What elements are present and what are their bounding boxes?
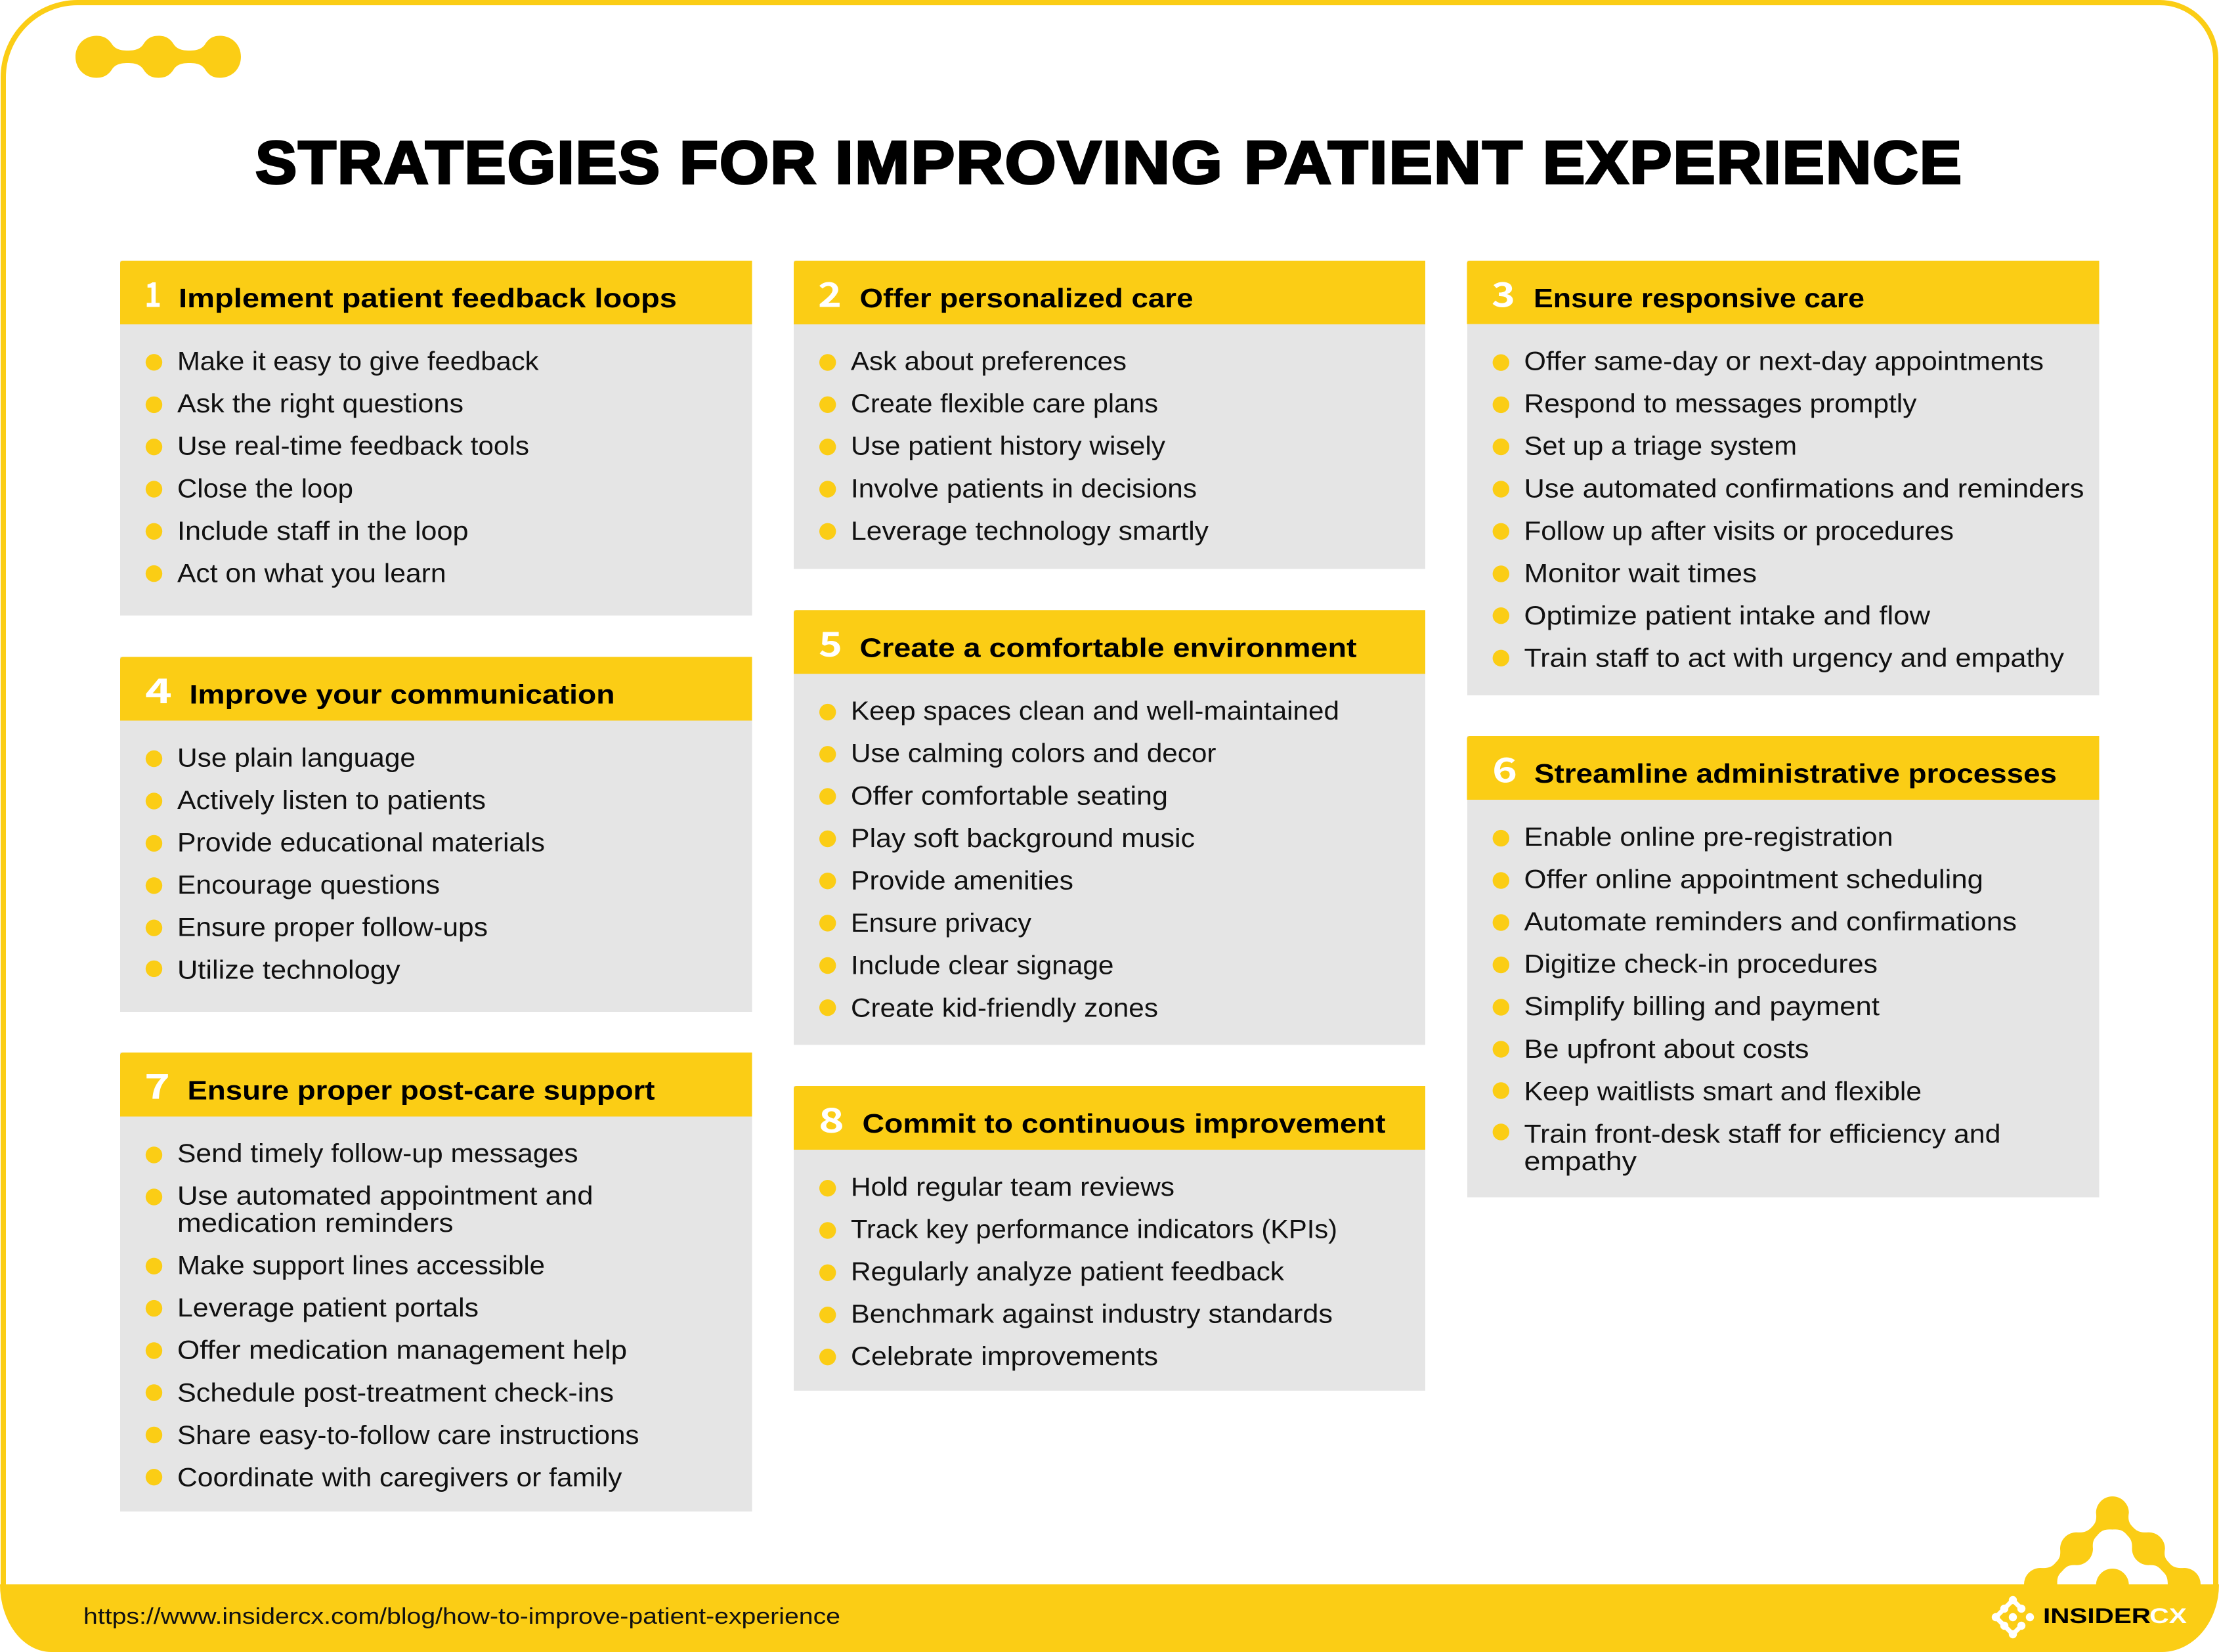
bullets <box>1493 830 1509 1141</box>
panel: 6 Streamline administrative processes <box>1467 736 2100 1198</box>
list text: Use patient history wisely <box>851 432 1165 461</box>
title: FOR <box>679 129 817 196</box>
list text: Use automated appointment and <box>177 1181 593 1210</box>
list text: Optimize patient intake and flow <box>1524 601 1930 630</box>
list text: Monitor wait times <box>1524 559 1757 588</box>
list text: Send timely follow-up messages <box>177 1139 578 1168</box>
list text: Follow up after visits or procedures <box>1524 517 1954 546</box>
header band <box>120 261 752 324</box>
title: STRATEGIES <box>255 129 661 196</box>
list text: Respond to messages promptly <box>1524 389 1917 418</box>
list text: Automate reminders and confirmations <box>1524 907 2017 936</box>
panel: 8 Commit to continuous improvement <box>794 1086 1425 1391</box>
list text <box>1524 347 2084 673</box>
list text: Actively listen to patients <box>177 786 486 815</box>
heading: Ensure responsive care <box>1534 283 1864 313</box>
list text: Hold regular team reviews <box>851 1173 1174 1202</box>
bullets <box>146 750 162 977</box>
list text: Ensure proper follow-ups <box>177 913 488 942</box>
number: 2 <box>818 268 842 316</box>
list text: Make it easy to give feedback <box>177 347 540 376</box>
heading: Improve your communication <box>189 679 614 709</box>
number: 5 <box>819 617 842 666</box>
header band <box>120 657 752 721</box>
bullets <box>819 704 836 1016</box>
panel background <box>1467 261 2100 695</box>
list text <box>851 1173 1337 1371</box>
list text: Act on what you learn <box>177 559 446 588</box>
list text: medication reminders <box>177 1209 453 1238</box>
panel: 2 Offer personalized care <box>794 261 1425 569</box>
number: 8 <box>819 1093 844 1142</box>
header band <box>794 1086 1425 1150</box>
list text <box>177 347 540 588</box>
panel background <box>794 610 1425 1045</box>
number: 7 <box>144 1060 170 1108</box>
panel background <box>1467 736 2100 1198</box>
icon: corner network shape <box>2024 1496 2201 1585</box>
header band <box>120 1053 752 1116</box>
bullets <box>819 354 836 540</box>
list text: Offer online appointment scheduling <box>1524 865 1983 894</box>
header band <box>1467 736 2100 800</box>
heading: Streamline administrative processes <box>1534 758 2057 789</box>
list text: Train front-desk staff for efficiency and <box>1524 1119 2001 1148</box>
footer url: https://www.insidercx.com/blog/how-to-improve-patient-experience <box>83 1604 840 1629</box>
list text <box>851 697 1339 1022</box>
list text <box>1524 823 2017 1176</box>
list text: Benchmark against industry standards <box>851 1300 1333 1329</box>
list text: Simplify billing and payment <box>1524 992 1880 1021</box>
list text: Offer comfortable seating <box>851 781 1168 810</box>
list text: Use plain language <box>177 743 416 772</box>
list text: Provide amenities <box>851 867 1073 896</box>
title: IMPROVING <box>835 129 1224 196</box>
list text: Ask the right questions <box>177 389 463 418</box>
list text: Schedule post-treatment check-ins <box>177 1378 614 1407</box>
heading: Create a comfortable environment <box>860 632 1357 663</box>
panel background <box>120 1053 752 1511</box>
logo wordmark accent: CX <box>2149 1604 2187 1628</box>
list text: Leverage technology smartly <box>851 517 1209 546</box>
heading: Commit to continuous improvement <box>863 1108 1386 1139</box>
list text: Celebrate improvements <box>851 1342 1158 1371</box>
list text: Make support lines accessible <box>177 1251 545 1280</box>
list text <box>177 743 545 984</box>
number: 1 <box>144 268 162 316</box>
list text: Use automated confirmations and reminders <box>1524 474 2084 503</box>
header band <box>794 261 1425 324</box>
logo wordmark: INSIDER <box>2043 1604 2151 1628</box>
list text: Encourage questions <box>177 871 440 900</box>
number: 4 <box>145 664 172 713</box>
list text: Include clear signage <box>851 951 1113 980</box>
heading: Ensure proper post-care support <box>188 1076 655 1106</box>
panel background <box>794 261 1425 569</box>
list text: Utilize technology <box>177 955 400 984</box>
bullets <box>1493 355 1509 666</box>
list text: Regularly analyze patient feedback <box>851 1257 1285 1286</box>
list text <box>177 1139 639 1492</box>
panel background <box>120 657 752 1012</box>
bullets <box>146 1146 162 1485</box>
panel background <box>120 261 752 616</box>
panel: 1 Implement patient feedback loops <box>120 261 752 616</box>
list text: Share easy-to-follow care instructions <box>177 1421 639 1450</box>
list text: Ask about preferences <box>851 347 1127 376</box>
title: PATIENT <box>1244 129 1524 196</box>
list text: Set up a triage system <box>1524 432 1797 461</box>
list text: Close the loop <box>177 474 353 503</box>
list text: Track key performance indicators (KPIs) <box>851 1215 1337 1244</box>
panel: 4 Improve your communication <box>120 657 752 1012</box>
number: 3 <box>1492 268 1515 316</box>
panel: 5 Create a comfortable environment <box>794 610 1425 1045</box>
list text: Use calming colors and decor <box>851 739 1216 768</box>
list text: Create kid-friendly zones <box>851 993 1158 1022</box>
panel: 7 Ensure proper post-care support <box>120 1053 752 1511</box>
list text: Offer medication management help <box>177 1336 627 1365</box>
logo: InsiderCX <box>1992 1596 2151 1638</box>
bullets <box>146 354 162 582</box>
list text: Play soft background music <box>851 824 1195 853</box>
list text: Provide educational materials <box>177 829 545 858</box>
list text: Keep spaces clean and well-maintained <box>851 697 1339 726</box>
panel background <box>794 1086 1425 1391</box>
list text: Enable online pre-registration <box>1524 823 1893 852</box>
number: 6 <box>1492 743 1517 792</box>
footer bar <box>0 1584 2219 1652</box>
list text: Include staff in the loop <box>177 517 469 546</box>
list text: Involve patients in decisions <box>851 474 1197 503</box>
list text: Leverage patient portals <box>177 1293 479 1322</box>
header band <box>1467 261 2100 324</box>
list text: Create flexible care plans <box>851 389 1158 418</box>
heading: Implement patient feedback loops <box>179 283 677 313</box>
header band <box>794 610 1425 674</box>
list text: Ensure privacy <box>851 909 1031 938</box>
panel: 3 Ensure responsive care <box>1467 261 2100 695</box>
heading: Offer personalized care <box>860 283 1194 313</box>
list text: Use real-time feedback tools <box>177 432 529 461</box>
list text: Keep waitlists smart and flexible <box>1524 1077 1922 1106</box>
list text <box>851 347 1209 546</box>
list text: Digitize check-in procedures <box>1524 950 1878 979</box>
title <box>255 129 1963 196</box>
list text: Coordinate with caregivers or family <box>177 1463 622 1492</box>
list text: Offer same-day or next-day appointments <box>1524 347 2044 376</box>
title: EXPERIENCE <box>1543 129 1963 196</box>
list text: Be upfront about costs <box>1524 1035 1809 1064</box>
bullets <box>819 1180 836 1365</box>
logo emblem <box>1992 1596 2034 1638</box>
list text: Train staff to act with urgency and empathy <box>1524 644 2064 673</box>
icon: top-left wave ornament <box>75 35 241 77</box>
list text: empathy <box>1524 1147 1637 1176</box>
